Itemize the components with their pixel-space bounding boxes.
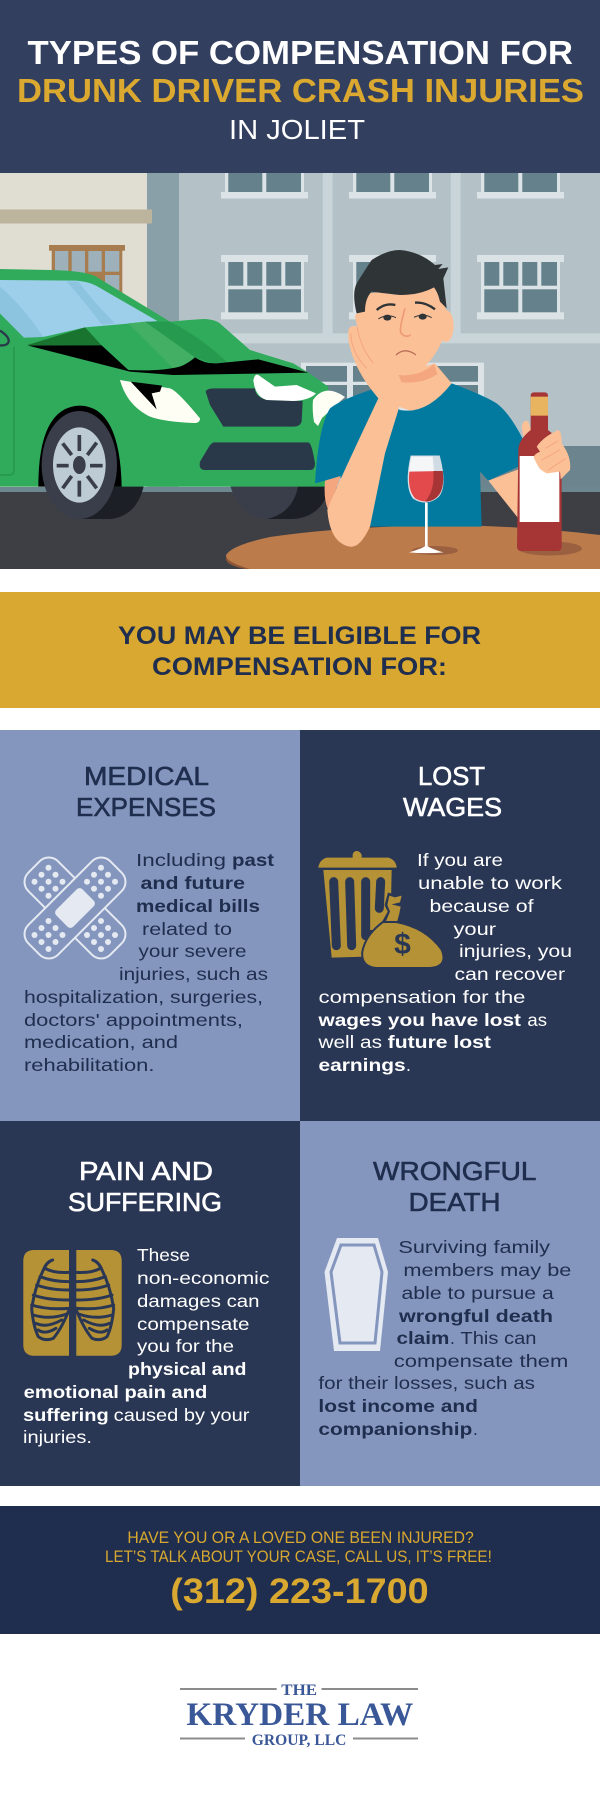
text: medical expenses body <box>24 850 274 1075</box>
text: pain and suffering body: damages can <box>137 1291 260 1311</box>
text: lost wages body: If you are <box>417 850 503 870</box>
text: pain and suffering body: These <box>137 1245 190 1265</box>
heading: lost wages: LOST <box>418 761 485 791</box>
text: pain and suffering body: emotional pain and <box>24 1382 207 1402</box>
text: wrongful death body: for their losses, such as <box>318 1373 535 1393</box>
gold banner: eligibility heading: COMPENSATION FOR: <box>152 653 447 681</box>
heading: pain and suffering <box>68 1156 222 1217</box>
text: lost wages body: injuries, you <box>459 941 572 961</box>
logo: The Kryder Law Group, LLC: KRYDER LAW <box>186 1697 413 1733</box>
text: pain and suffering body: caused by your <box>114 1405 250 1425</box>
text: lost wages body: . <box>406 1055 411 1075</box>
heading: lost wages: WAGES <box>403 792 502 822</box>
man at table <box>315 250 523 547</box>
text: lost wages body <box>317 850 572 1075</box>
text: wrongful death body: . <box>450 1328 455 1348</box>
icon: coffin <box>324 1238 388 1351</box>
text: wrongful death body: Surviving family <box>398 1237 550 1257</box>
gold banner: eligibility heading: YOU MAY BE ELIGIBLE FOR <box>118 622 481 650</box>
call to action band <box>0 1506 600 1634</box>
header panel with title: TYPES OF COMPENSATION FOR <box>28 34 573 71</box>
text: pain and suffering body: non-economic <box>137 1268 270 1288</box>
logo: The Kryder Law Group, LLC <box>180 1682 418 1749</box>
text: wrongful death body: wrongful death <box>398 1306 553 1326</box>
text: pain and suffering body: injuries. <box>23 1427 92 1447</box>
wine bottle in hand <box>517 392 570 551</box>
text: medical expenses body: past <box>232 850 274 870</box>
text: lost wages body: compensation for the <box>318 987 526 1007</box>
call to action band: HAVE YOU OR A LOVED ONE BEEN INJURED? <box>127 1529 474 1547</box>
gold banner: eligibility heading <box>0 592 600 708</box>
icon: trash can and money bag <box>318 851 443 967</box>
text: pain and suffering body: physical and <box>128 1359 246 1379</box>
text: lost wages body: unable to work <box>418 873 562 893</box>
heading: pain and suffering: SUFFERING <box>68 1187 222 1217</box>
text: pain and suffering body: you for the <box>137 1336 234 1356</box>
text: medical expenses body: your severe <box>138 941 246 961</box>
text: wrongful death body: This can <box>460 1328 536 1348</box>
header panel with title: IN JOLIET <box>229 114 365 145</box>
text: pain and suffering body: suffering <box>23 1405 109 1425</box>
panel: pain and suffering <box>0 1121 300 1486</box>
call to action band: LET’S TALK ABOUT YOUR CASE, CALL US, IT’S FREE! <box>105 1548 492 1566</box>
text: lost wages body: as <box>527 1010 547 1030</box>
text: medical expenses body: Including <box>136 850 226 870</box>
text: wrongful death body: able to pursue a <box>402 1283 554 1303</box>
text: lost wages body: your <box>454 919 496 939</box>
text: wrongful death body: claim <box>396 1328 449 1348</box>
text: wrongful death body <box>318 1237 571 1439</box>
logo: The Kryder Law Group, LLC: THE <box>281 1682 317 1699</box>
text: wrongful death body: . <box>473 1419 478 1439</box>
text: wrongful death body: lost income and <box>318 1396 478 1416</box>
icon: crossed bandages <box>19 852 131 964</box>
heading: medical expenses: MEDICAL <box>84 761 209 791</box>
text: medical expenses body: injuries, such as <box>119 964 268 984</box>
heading: medical expenses <box>76 761 216 822</box>
header panel with title: DRUNK DRIVER CRASH INJURIES <box>17 72 584 109</box>
icon: rib cage <box>23 1250 122 1356</box>
wine glass <box>408 456 458 555</box>
text: lost wages body: wages you have lost <box>317 1010 521 1030</box>
text: lost wages body: well as <box>317 1032 382 1052</box>
text: medical expenses body: hospitalization, surgeries, <box>24 987 263 1007</box>
broken headlight piece <box>313 391 345 426</box>
call to action band: (312) 223-1700 <box>170 1572 429 1611</box>
text: medical expenses body: medication, and <box>24 1032 178 1052</box>
heading: medical expenses: EXPENSES <box>76 792 216 822</box>
logo: The Kryder Law Group, LLC: GROUP, LLC <box>252 1732 346 1749</box>
text: lost wages body: because of <box>430 896 534 916</box>
text: pain and suffering body <box>23 1245 270 1447</box>
crashed green car <box>0 269 330 519</box>
panel: wrongful death <box>300 1121 600 1486</box>
heading: wrongful death <box>373 1156 536 1217</box>
text: medical expenses body: doctors' appointments, <box>24 1010 243 1030</box>
building windows <box>49 173 564 423</box>
text: medical expenses body: rehabilitation. <box>24 1055 154 1075</box>
text: lost wages body: can recover <box>454 964 565 984</box>
panel: lost wages <box>300 730 600 1121</box>
illustration: man drinking with crashed car <box>0 173 600 569</box>
icon: trash can and money bag: $ <box>394 928 411 961</box>
heading: wrongful death: WRONGFUL <box>373 1156 536 1186</box>
text: medical expenses body: related to <box>142 919 232 939</box>
heading: pain and suffering: PAIN AND <box>79 1156 213 1186</box>
text: wrongful death body: compensate them <box>394 1351 568 1371</box>
text: pain and suffering body: compensate <box>137 1314 250 1334</box>
text: medical expenses body: medical bills <box>136 896 260 916</box>
panel: medical expenses <box>0 730 300 1121</box>
table <box>226 525 600 569</box>
text: medical expenses body: and future <box>140 873 245 893</box>
text: lost wages body: earnings <box>318 1055 406 1075</box>
text: wrongful death body: companionship <box>318 1419 472 1439</box>
heading: wrongful death: DEATH <box>409 1187 500 1217</box>
heading: lost wages <box>403 761 502 822</box>
text: lost wages body: future lost <box>388 1032 491 1052</box>
text: wrongful death body: members may be <box>403 1260 571 1280</box>
header panel with title <box>0 0 600 173</box>
